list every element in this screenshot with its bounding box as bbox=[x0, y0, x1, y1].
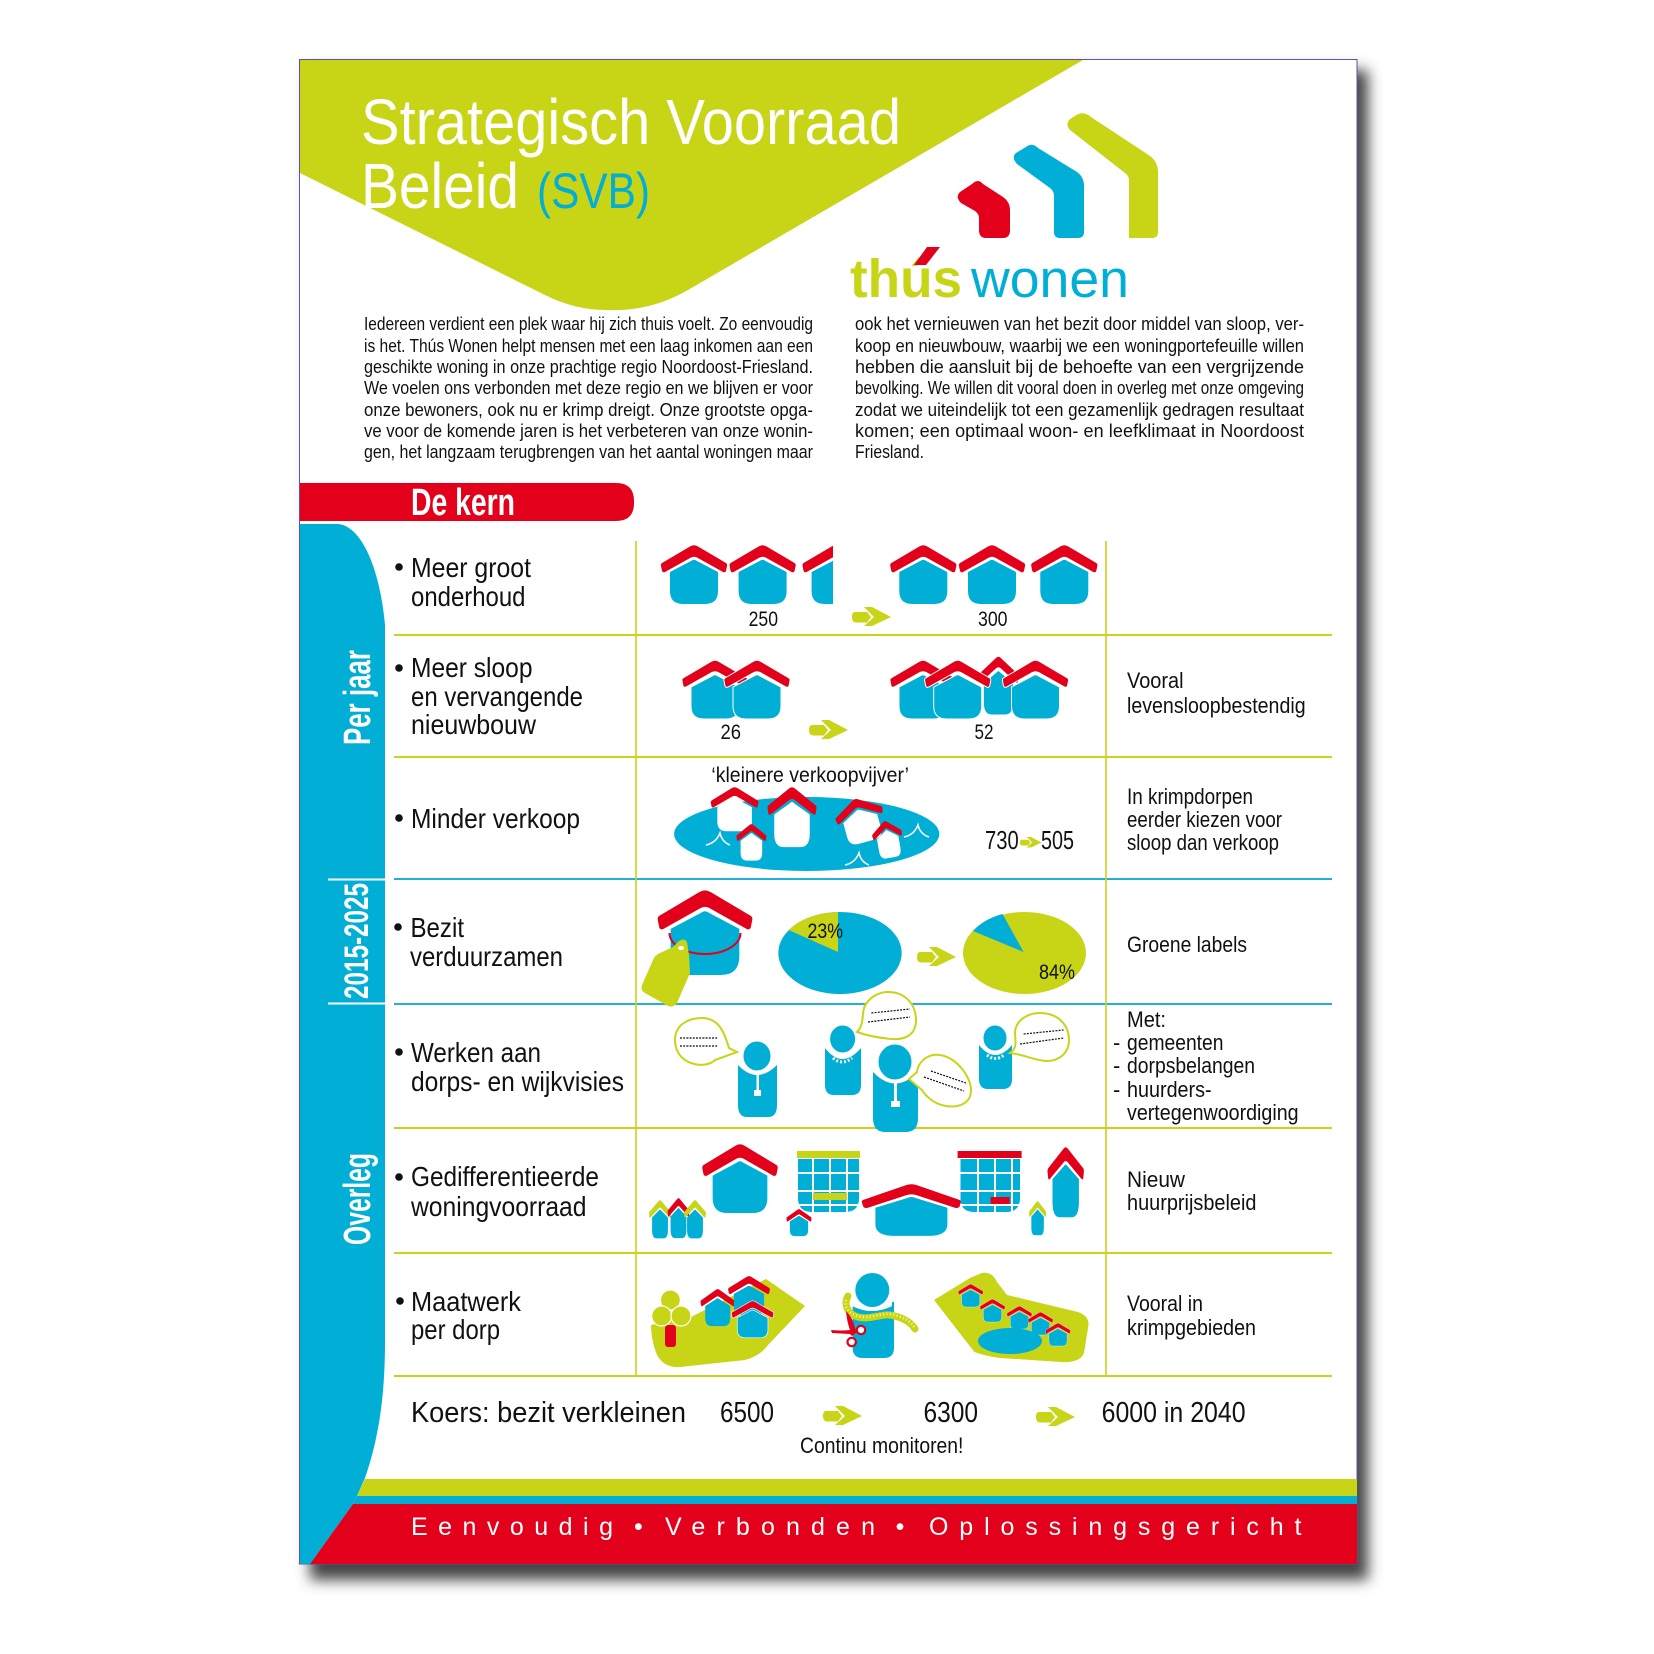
row 3 icon: kleinere verkoopvijver bbox=[674, 764, 939, 871]
blue sidebar with vertical labels: 2015-2025 bbox=[338, 883, 376, 999]
row 6 note bbox=[1127, 1167, 1256, 1215]
tagline: • bbox=[896, 1513, 904, 1541]
row 2 icons: houses 26 to 52 bbox=[682, 656, 1069, 744]
row 7 label: Maatwerk per dorp: per dorp bbox=[411, 1314, 500, 1345]
intro text column 2 bbox=[855, 314, 1304, 462]
row 4 label: Bezit verduurzamen bbox=[394, 912, 563, 972]
row 3 note: sloop dan verkoop bbox=[1127, 830, 1279, 855]
intro text column 2: hebben die aansluit bij de behoefte van een vergrijzende bbox=[855, 357, 1304, 377]
row 2 note: Vooral bbox=[1127, 668, 1184, 693]
row 2 note bbox=[1127, 668, 1306, 718]
logo: thús wonen: wonen bbox=[970, 250, 1129, 309]
row 5 label: Werken aan dorps- en wijkvisies: Werken aan bbox=[411, 1037, 541, 1068]
row 5 label: Werken aan dorps- en wijkvisies bbox=[395, 1037, 624, 1097]
row 5 note: vertegenwoordiging bbox=[1127, 1100, 1299, 1125]
row 3 note: In krimpdorpen bbox=[1127, 784, 1253, 809]
row 7 icon: village land with houses and pond bbox=[934, 1273, 1089, 1362]
row 3 label: Minder verkoop: Minder verkoop bbox=[411, 803, 580, 834]
row 3 icon: kleinere verkoopvijver: ‘kleinere verkoopvijver’ bbox=[711, 764, 909, 787]
blue sidebar with vertical labels: Per jaar bbox=[337, 650, 379, 745]
row 7 note: Vooral in bbox=[1127, 1291, 1203, 1316]
row 7 label: Maatwerk per dorp: Maatwerk bbox=[411, 1286, 522, 1317]
tagline: Oplossingsgericht bbox=[929, 1513, 1302, 1541]
intro text column 2: bevolking. We willen dit vooral doen in overleg met onze omgeving bbox=[855, 378, 1304, 398]
row 1 label: Meer groot onderhoud: Meer groot bbox=[411, 552, 531, 583]
heading bar: De kern: De kern bbox=[411, 482, 515, 524]
intro text column 2: koop en nieuwbouw, waarbij we een woningportefeuille willen bbox=[855, 336, 1304, 356]
row 4 chart: pie 84% bbox=[963, 912, 1086, 994]
row 1 icons: houses 250 to 300: 250 bbox=[749, 608, 778, 631]
intro text column 1: Iedereen verdient een plek waar hij zich thuis voelt. Zo eenvoudig bbox=[364, 314, 813, 334]
intro text column 1 bbox=[364, 314, 813, 462]
row 4 chart: pie 23% bbox=[778, 912, 902, 994]
row 3 figures: 730 to 505 bbox=[985, 825, 1074, 855]
row 5 note: - bbox=[1113, 1053, 1120, 1078]
intro text column 2: Friesland. bbox=[855, 442, 924, 462]
row 1 label: Meer groot onderhoud bbox=[395, 552, 531, 612]
intro text column 2: zodat we uiteindelijk tot een gezamenlijk gedragen resultaat bbox=[855, 400, 1304, 420]
row 4 note: Groene labels bbox=[1127, 932, 1247, 957]
row 5 note: huurders- bbox=[1127, 1077, 1212, 1102]
intro text column 2: ook het vernieuwen van het bezit door middel van sloop, ver- bbox=[855, 314, 1304, 334]
course line: Koers bezit verkleinen: Koers: bezit verkleinen bbox=[411, 1397, 686, 1429]
row 1 label: Meer groot onderhoud: onderhoud bbox=[411, 581, 526, 612]
row 4 label: Bezit verduurzamen: Bezit bbox=[410, 912, 464, 943]
row 5 note: gemeenten bbox=[1127, 1030, 1224, 1055]
title bbox=[361, 86, 901, 222]
row 5 icons: people with speech bubbles bbox=[675, 992, 1069, 1132]
blue sidebar with vertical labels bbox=[300, 524, 385, 1564]
intro text column 1: is het. Thús Wonen helpt mensen met een laag inkomen aan een bbox=[364, 336, 813, 356]
row 6 note: huurprijsbeleid bbox=[1127, 1190, 1256, 1215]
text: Continu monitoren: Continu monitoren! bbox=[800, 1433, 963, 1458]
table grid bbox=[394, 541, 1332, 1376]
row 5 note bbox=[1113, 1007, 1299, 1125]
title: Strategisch Voorraad bbox=[361, 86, 901, 158]
row 4 label: Bezit verduurzamen: verduurzamen bbox=[410, 941, 563, 972]
title: Beleid bbox=[361, 150, 519, 222]
row 6 label: Gedifferentieerde woningvoorraad: woningvoorraad bbox=[410, 1191, 586, 1222]
row 2 label: Meer sloop: Meer sloop bbox=[411, 652, 532, 683]
row 3 figures: 730 to 505: 730 bbox=[985, 825, 1019, 855]
row 5 note: dorpsbelangen bbox=[1127, 1053, 1255, 1078]
header green shape bbox=[300, 60, 1083, 310]
intro text column 1: We voelen ons verbonden met deze regio en we blijven er voor bbox=[364, 378, 813, 398]
intro text column 1: onze bewoners, ook nu er krimp dreigt. Onze grootste opga- bbox=[364, 400, 813, 420]
title: (SVB) bbox=[537, 163, 650, 219]
row 7 note: krimpgebieden bbox=[1127, 1315, 1256, 1340]
tagline: Eenvoudig bbox=[411, 1513, 613, 1541]
row 1 icons: houses 250 to 300: 300 bbox=[978, 608, 1008, 631]
row 2 icons: houses 26 to 52: 52 bbox=[974, 721, 994, 744]
logo: thús wonen bbox=[850, 113, 1158, 309]
course line: Koers bezit verkleinen: 6000 in 2040 bbox=[1102, 1397, 1246, 1429]
row 4 chart: pie 84%: 84% bbox=[1039, 961, 1075, 984]
row 3 note: eerder kiezen voor bbox=[1127, 807, 1282, 832]
logo: thús wonen: thús bbox=[850, 249, 962, 309]
blue sidebar with vertical labels: Overleg bbox=[337, 1153, 379, 1245]
intro text column 1: ve voor de komende jaren is het verbeteren van onze wonin- bbox=[364, 421, 813, 441]
arrow bbox=[917, 947, 956, 966]
intro text column 2: komen; een optimaal woon- en leefklimaat in Noordoost bbox=[855, 421, 1304, 441]
course line: Koers bezit verkleinen: 6300 bbox=[924, 1397, 978, 1429]
row 4 icon: house with label tag bbox=[641, 890, 752, 1007]
row 5 note: Met: bbox=[1127, 1007, 1166, 1032]
row 6 icons: varied housing stock bbox=[649, 1144, 1084, 1238]
page shadow bbox=[310, 70, 1368, 1580]
row 1 icons: houses 250 to 300 bbox=[661, 545, 1097, 631]
intro text column 1: geschikte woning in onze prachtige regio Noordoost-Friesland. bbox=[364, 357, 813, 377]
tagline: Verbonden bbox=[665, 1513, 875, 1541]
row 7 icon: village land with houses and tree bbox=[651, 1276, 805, 1367]
row 3 figures: 730 to 505: 505 bbox=[1041, 825, 1074, 855]
row 3 note bbox=[1127, 784, 1282, 855]
row 2 icons: houses 26 to 52: 26 bbox=[720, 721, 741, 744]
heading bar: De kern bbox=[300, 482, 634, 524]
row 7 label: Maatwerk per dorp bbox=[396, 1286, 522, 1345]
footer stripes bbox=[310, 1479, 1357, 1564]
row 2 label: Meer sloop: nieuwbouw bbox=[411, 709, 537, 740]
row 2 note: levensloopbestendig bbox=[1127, 693, 1306, 718]
row 4 chart: pie 23%: 23% bbox=[808, 920, 843, 943]
tagline bbox=[411, 1513, 1302, 1541]
row 6 label: Gedifferentieerde woningvoorraad bbox=[395, 1161, 599, 1222]
row 6 note: Nieuw bbox=[1127, 1167, 1185, 1192]
row 2 label: Meer sloop: en vervangende bbox=[411, 681, 583, 712]
row 7 note bbox=[1127, 1291, 1256, 1340]
course line: Koers bezit verkleinen: 6500 bbox=[720, 1397, 774, 1429]
row 5 note: - bbox=[1113, 1030, 1120, 1055]
row 5 note: - bbox=[1113, 1077, 1120, 1102]
row 6 label: Gedifferentieerde woningvoorraad: Gedifferentieerde bbox=[411, 1161, 599, 1192]
page sheet bbox=[300, 60, 1357, 1564]
row 5 label: Werken aan dorps- en wijkvisies: dorps- en wijkvisies bbox=[411, 1066, 624, 1097]
course line: Koers bezit verkleinen bbox=[411, 1397, 1246, 1429]
row 2 label: Meer sloop bbox=[395, 652, 583, 740]
row 7 icon: tailor figure with tape and scissors bbox=[831, 1273, 915, 1358]
tagline: • bbox=[634, 1513, 643, 1541]
intro text column 1: gen, het langzaam terugbrengen van het aantal woningen maar bbox=[364, 442, 813, 462]
